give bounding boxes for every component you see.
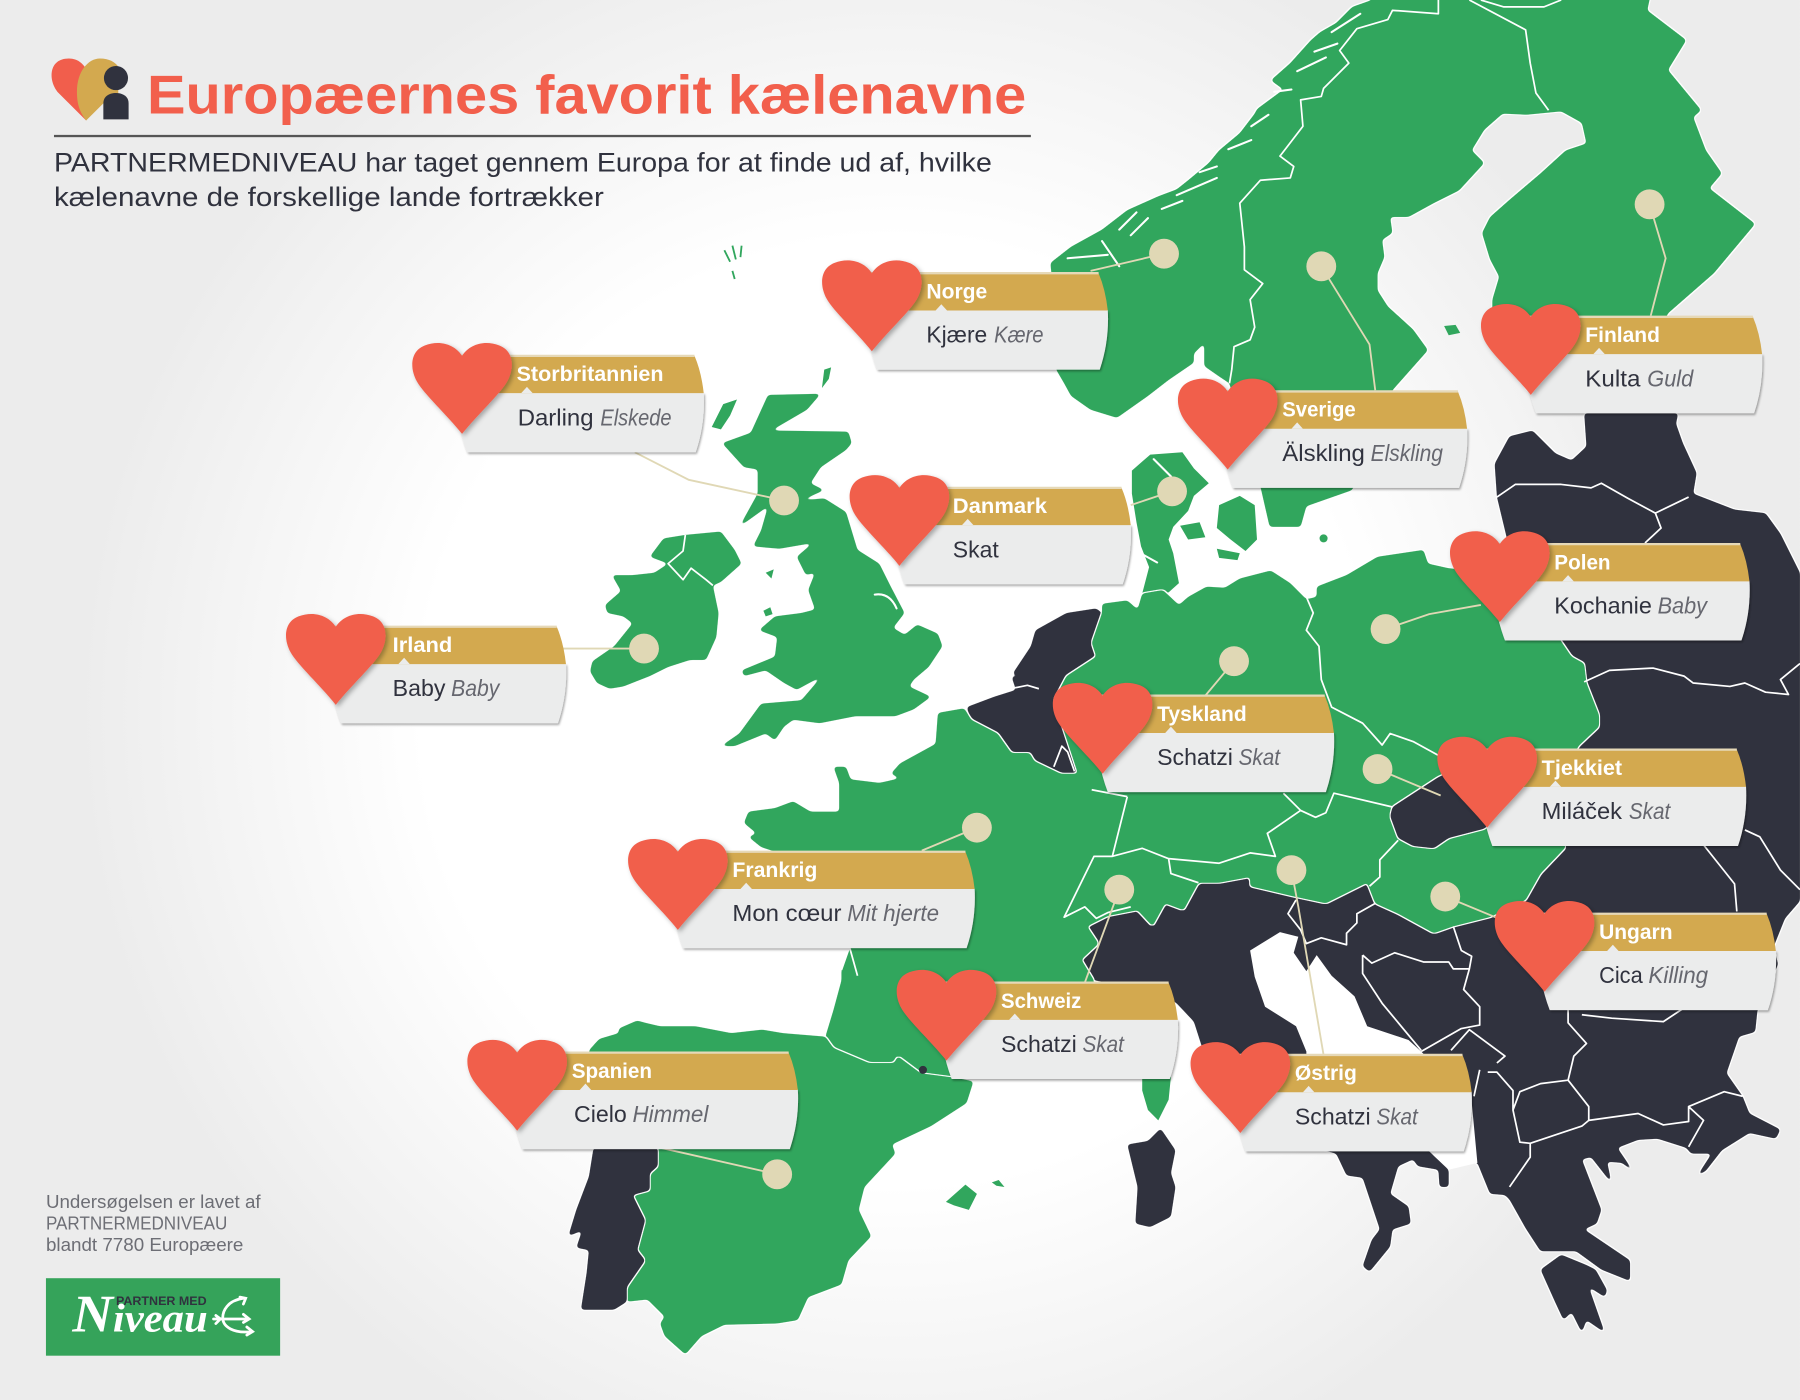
- country name: Finland: [1585, 324, 1660, 347]
- country name: Danmark: [953, 495, 1047, 518]
- subtitle: kælenavne de forskellige lande fortrækker: [54, 182, 604, 212]
- country name: Østrig: [1295, 1062, 1357, 1085]
- logo: Partner med Niveau: [46, 1278, 280, 1356]
- heart: [822, 260, 922, 351]
- heart: [1053, 683, 1152, 774]
- nickname: [1599, 962, 1708, 988]
- heart: [1191, 1042, 1290, 1133]
- nickname: [1585, 365, 1694, 391]
- small islands: [712, 325, 1460, 616]
- subtitle: [54, 148, 992, 212]
- card: Norge: [822, 260, 1108, 370]
- nickname: Himmel: [633, 1101, 709, 1127]
- card: Frankrig: [628, 839, 975, 948]
- Bornholm: [1320, 534, 1328, 542]
- nickname: Miláček: [1542, 798, 1622, 824]
- country name: Ungarn: [1599, 921, 1673, 944]
- nickname: Darling: [518, 404, 594, 430]
- map of Europe: [568, 0, 1800, 1355]
- Ireland: [590, 531, 742, 689]
- card: Sverige: [1178, 379, 1467, 488]
- nickname: Skat: [1083, 1031, 1125, 1057]
- nickname: [1157, 744, 1281, 770]
- nickname: Cielo: [574, 1101, 627, 1127]
- heart: [850, 475, 949, 566]
- Faroe islands: [724, 246, 742, 279]
- card: Østrig: [1191, 1042, 1472, 1151]
- survey note: Undersøgelsen er lavet af: [46, 1191, 262, 1212]
- nickname: Schatzi: [1001, 1031, 1077, 1057]
- heart: [628, 839, 728, 930]
- nickname: Elskling: [1371, 440, 1443, 466]
- nickname: Baby: [1658, 593, 1708, 619]
- nickname: Mon cœur: [732, 900, 842, 926]
- nickname: [732, 900, 939, 926]
- heart: [286, 614, 386, 705]
- title divider: [54, 135, 1031, 137]
- nickname: Skat: [953, 536, 999, 562]
- Norwegian fjords: [875, 14, 1360, 608]
- heart: [1495, 901, 1594, 992]
- Spain: [589, 1020, 973, 1355]
- country name: Irland: [393, 634, 452, 657]
- nickname: Skat: [1239, 744, 1281, 770]
- non-participating countries: Eastern Europe, Italy and Balkans: [1081, 413, 1800, 1281]
- Benelux: [967, 608, 1102, 774]
- Denmark: [1132, 452, 1257, 593]
- survey note: PARTNERMEDNIVEAU: [46, 1212, 227, 1233]
- nickname: [1295, 1103, 1419, 1129]
- logo: Partner med Niveau: PARTNER MED: [116, 1294, 207, 1308]
- country name: Spanien: [572, 1060, 652, 1083]
- Portugal: [568, 1148, 658, 1310]
- card: Storbritannien: [412, 343, 704, 452]
- nickname: [393, 675, 500, 701]
- survey note: [46, 1191, 262, 1255]
- leader lines: [563, 204, 1666, 1174]
- country name: Norge: [926, 280, 987, 303]
- logo: Partner med Niveau: Niveau: [71, 1286, 208, 1344]
- country name: Storbritannien: [517, 363, 664, 386]
- card: Irland: [286, 614, 566, 723]
- heart: [1450, 531, 1550, 622]
- Sardinia: [1127, 1128, 1176, 1227]
- card: Finland: [1481, 304, 1762, 413]
- nickname: [518, 404, 672, 430]
- heart: [1481, 304, 1581, 395]
- Andorra: [919, 1066, 927, 1074]
- nickname: Skat: [1376, 1103, 1419, 1129]
- nickname: [926, 322, 1043, 348]
- heart: [1437, 737, 1537, 828]
- Slovakia: [1390, 758, 1538, 848]
- country name: Tjekkiet: [1542, 757, 1622, 780]
- country borders: [668, 0, 1800, 1187]
- nickname: Killing: [1648, 962, 1708, 988]
- country name: Sverige: [1282, 399, 1356, 422]
- nickname: Elskede: [600, 404, 672, 430]
- Peloponnese: [1541, 1255, 1607, 1333]
- nickname: [574, 1101, 709, 1127]
- heart: [1178, 379, 1278, 469]
- Balearic Islands and Corsica: [946, 1077, 1171, 1210]
- nickname: Schatzi: [1295, 1103, 1371, 1129]
- card: Schweiz: [897, 970, 1178, 1079]
- card: Spanien: [467, 1040, 798, 1149]
- card: Polen: [1450, 531, 1750, 641]
- nickname: Cica: [1599, 962, 1644, 988]
- card: Ungarn: [1495, 901, 1776, 1010]
- Scandinavia: [1050, 0, 1755, 527]
- logo arrows icon: [214, 1297, 253, 1335]
- nickname: Schatzi: [1157, 744, 1233, 770]
- nickname: [1554, 593, 1708, 619]
- nickname: Älskling: [1282, 440, 1365, 466]
- location dots: [629, 189, 1665, 1189]
- nickname: Kjære: [926, 322, 987, 348]
- nickname: Kulta: [1585, 365, 1641, 391]
- Great Britain: [721, 394, 942, 746]
- subtitle: PARTNERMEDNIVEAU har taget gennem Europa for at finde ud af, hvilke: [54, 148, 992, 178]
- card: Danmark: [850, 475, 1131, 584]
- country name: Frankrig: [732, 859, 817, 882]
- nickname: [1001, 1031, 1125, 1057]
- heart: [467, 1040, 567, 1131]
- nickname: Guld: [1647, 365, 1694, 391]
- heart: [412, 343, 512, 434]
- nickname: [1542, 798, 1672, 824]
- nickname: Baby: [451, 675, 500, 701]
- country name: Tyskland: [1157, 703, 1247, 726]
- title icon: hearts and person: [52, 59, 129, 121]
- nickname: [1282, 440, 1443, 466]
- nickname: Skat: [1629, 798, 1672, 824]
- nickname: Mit hjerte: [847, 900, 939, 926]
- France, Germany, Poland, Czechia, Austria, Switzerland, Hungary: [744, 550, 1599, 1078]
- title: Europæernes favorit kælenavne: [147, 64, 1026, 126]
- nickname: Baby: [393, 675, 446, 701]
- Adriatic Sea: [1250, 932, 1477, 1170]
- card: Tjekkiet: [1437, 737, 1746, 846]
- nickname: Kære: [994, 322, 1043, 348]
- country name: Schweiz: [1001, 990, 1081, 1013]
- heart: [897, 970, 996, 1061]
- card: Tyskland: [1053, 683, 1334, 792]
- nickname: Kochanie: [1554, 593, 1652, 619]
- country name: Polen: [1554, 551, 1611, 574]
- survey note: blandt 7780 Europæere: [46, 1234, 243, 1255]
